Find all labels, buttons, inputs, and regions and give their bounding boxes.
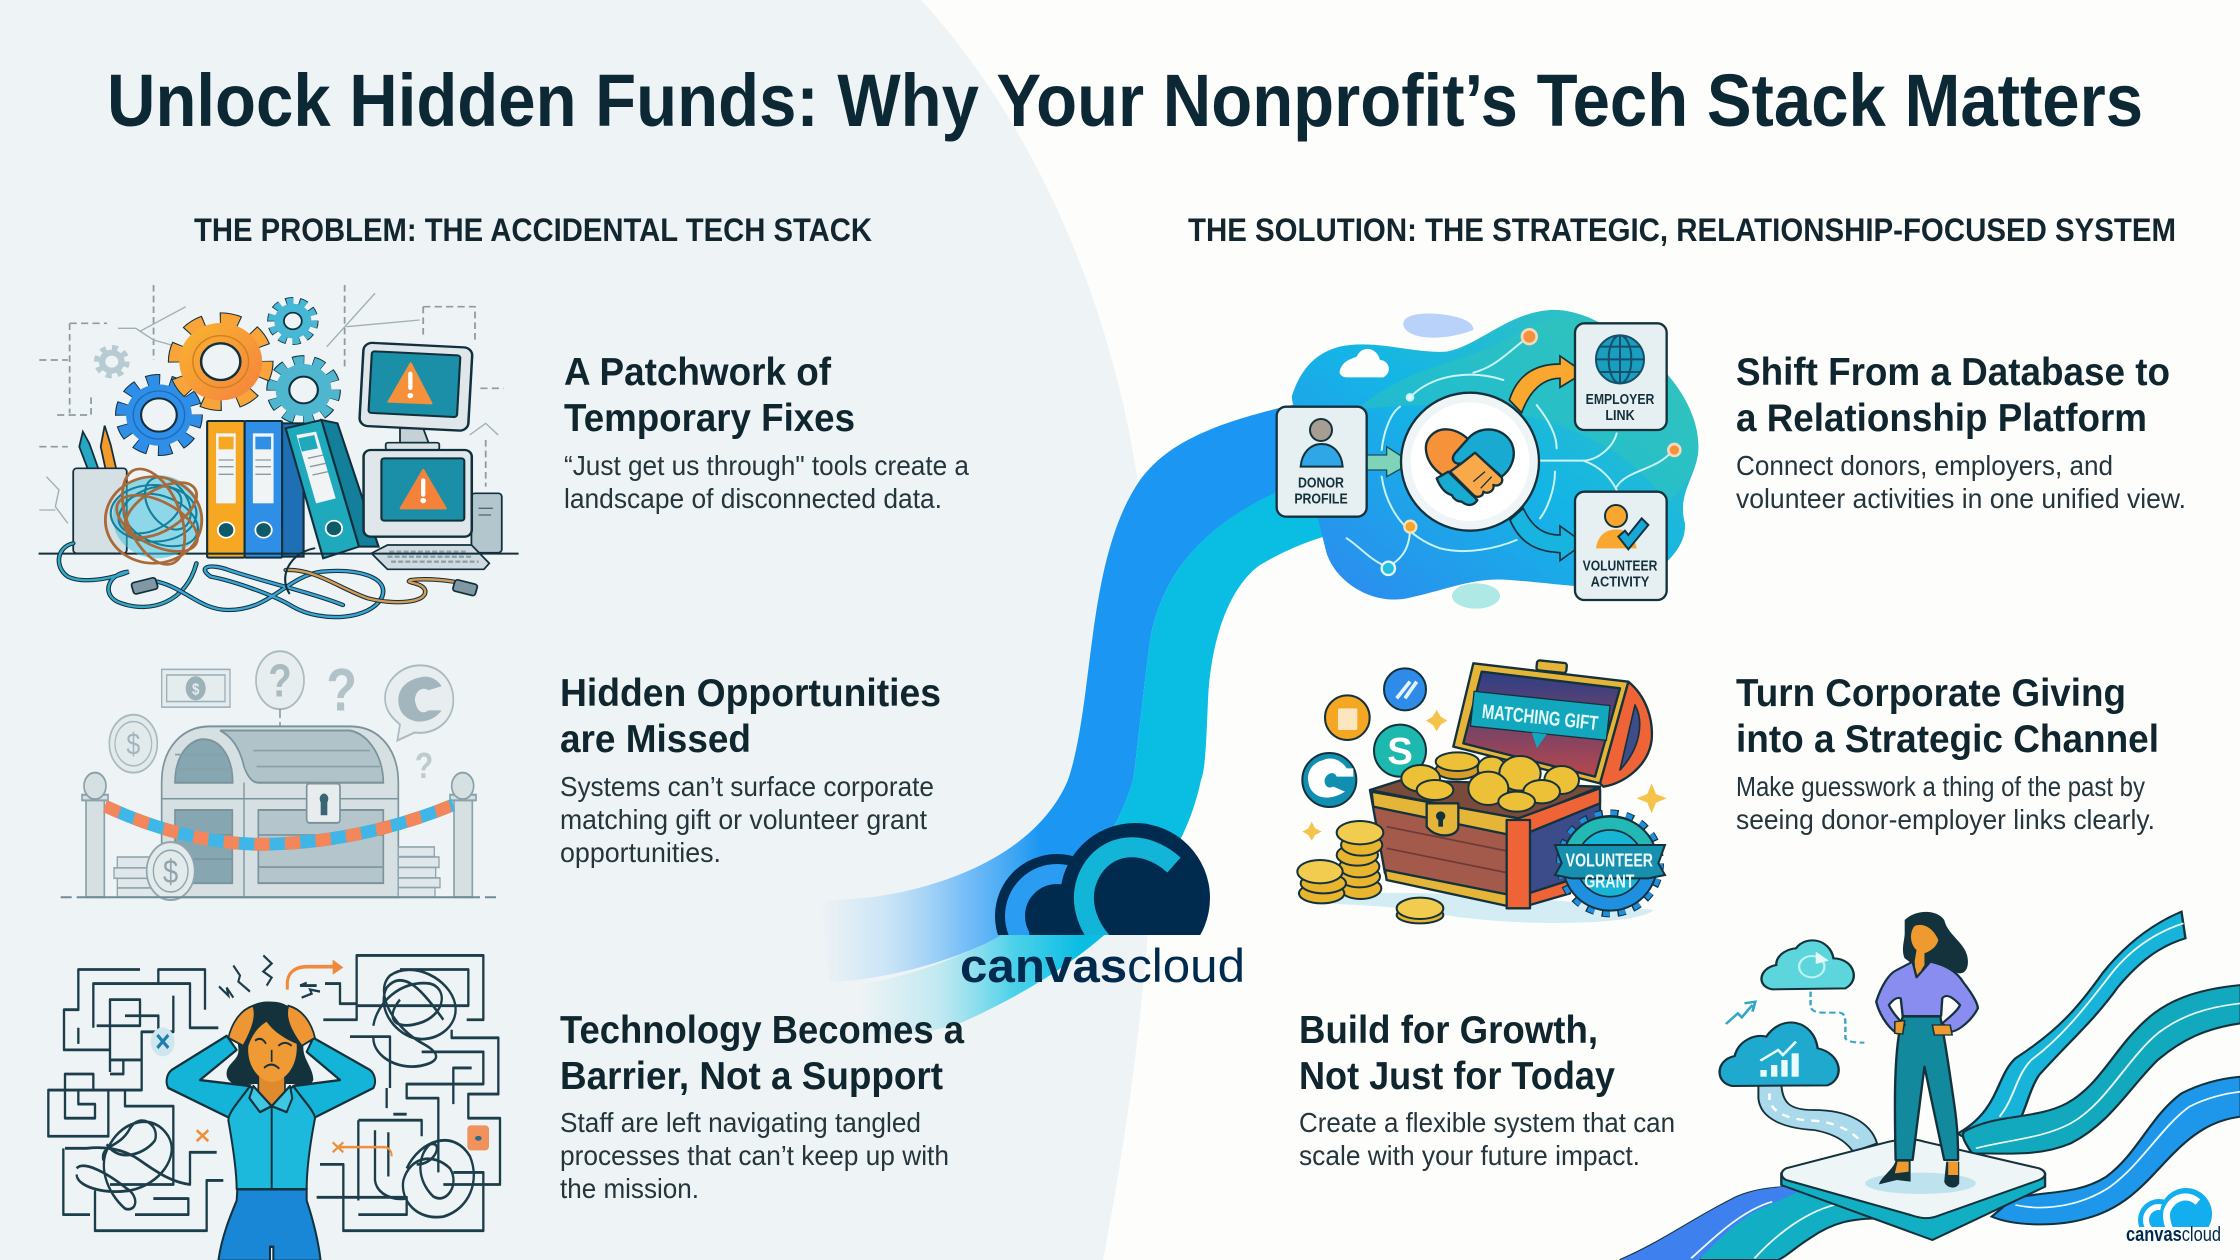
icon: question bubble (256, 651, 304, 740)
text block: patchwork of temporary fixes (564, 351, 969, 514)
card: donor profile: DONOR (1298, 475, 1344, 491)
chest opening (1370, 780, 1600, 820)
icon: blue cloud with chart (1720, 1023, 1839, 1086)
text block: corporate giving: Turn Corporate Giving (1736, 672, 2126, 715)
icon: small question mark: ? (415, 746, 433, 787)
left maze (48, 970, 223, 1231)
text block: build for growth: scale with your future impact. (1299, 1140, 1640, 1171)
text block: patchwork of temporary fixes: A Patchwork of (564, 351, 832, 394)
icons: floating coins (1302, 668, 1426, 807)
text block: relationship platform: Connect donors, employers, and (1736, 450, 2113, 481)
arrow: center to volunteer (1510, 508, 1584, 561)
icon: barrier posts (82, 773, 476, 897)
icon: dollar bill (162, 669, 230, 707)
text block: relationship platform (1736, 351, 2186, 514)
text block: hidden opportunities (560, 672, 941, 868)
icon: gray gear (97, 348, 127, 376)
stream: lower right (1992, 1077, 2240, 1224)
coin stacks (1297, 821, 1443, 923)
icons: floating coins: S (1387, 730, 1413, 773)
person: face and neck (1911, 925, 1938, 977)
person: neck and face (248, 1022, 297, 1106)
icon: document holder (73, 468, 127, 553)
icon: question mark large: ? (326, 656, 357, 723)
icons: sparkles (1302, 710, 1667, 841)
icon: grey chest (162, 726, 398, 897)
badge: volunteer grant: VOLUNTEER (1566, 850, 1653, 871)
icon: tangled cables (105, 461, 207, 572)
icon: orange gear (174, 318, 267, 405)
badge: volunteer grant: GRANT (1584, 871, 1635, 892)
text block: technology becomes a barrier: Staff are left navigating tangled (560, 1107, 921, 1138)
blob accents (1340, 313, 1698, 609)
card: donor profile (1277, 407, 1367, 517)
icon: striped rope (105, 805, 453, 844)
person: hands (1895, 1021, 1952, 1035)
text block: hidden opportunities: Hidden Opportunities (560, 672, 941, 715)
heading: the solution: THE SOLUTION: THE STRATEGIC, RELATIONSHIP-FOCUSED SYSTEM (1188, 212, 2176, 248)
coins in chest (1401, 752, 1579, 812)
icon: teal cloud with pie (1762, 940, 1854, 989)
icon: orange binder (207, 421, 245, 558)
chest lid (1453, 660, 1652, 787)
network lines (1347, 329, 1680, 575)
background: left curved panel (0, 0, 1155, 1260)
text block: hidden opportunities: opportunities. (560, 837, 721, 868)
illustration: patchwork of gears, binders, monitors and cables (39, 285, 519, 617)
icon: computer tower (471, 493, 502, 553)
logo: Canvas Cloud corner (2126, 1188, 2220, 1241)
card: employer link: LINK (1605, 408, 1635, 424)
heading: the problem: THE PROBLEM: THE ACCIDENTAL TECH STACK (194, 212, 872, 248)
blob background (1292, 310, 1698, 600)
text block: patchwork of temporary fixes: Temporary Fixes (564, 397, 855, 440)
text block: relationship platform: Shift From a Database to (1736, 351, 2170, 394)
text block: corporate giving (1736, 672, 2159, 835)
stream: middle right (1963, 985, 2240, 1154)
icon: small teal gear (271, 301, 314, 341)
icons: stress marks (219, 955, 320, 998)
ribbon connecting problem to solution (820, 395, 1340, 1035)
stream: lower left (1620, 1185, 1881, 1260)
text block: technology becomes a barrier (560, 1009, 964, 1204)
text block: corporate giving: into a Strategic Channel (1736, 718, 2159, 761)
chest shadow (1303, 893, 1653, 923)
icon: coin front (147, 842, 195, 900)
text block: hidden opportunities: are Missed (560, 718, 751, 761)
icon: blue gear (121, 380, 196, 450)
icon: coin left: $ (126, 727, 140, 761)
road from cloud (1758, 1083, 1877, 1152)
icon: coin left (109, 715, 157, 773)
icon: coin front: $ (163, 855, 178, 891)
text block: build for growth: Build for Growth, (1299, 1009, 1598, 1052)
icon: lower monitor with warning (364, 450, 472, 537)
card: volunteer activity (1575, 492, 1667, 600)
icon: loose cables below desk (59, 543, 478, 617)
illustration: person on platform with growth streams (1620, 912, 2240, 1260)
logo mark (995, 823, 1210, 935)
text block: patchwork of temporary fixes: landscape of disconnected data. (564, 483, 942, 514)
badge: volunteer grant (1555, 814, 1665, 913)
logo: Canvas Cloud main (960, 823, 1245, 992)
card: employer link (1575, 323, 1667, 430)
logo mark small (2138, 1188, 2212, 1227)
person: trousers (1895, 1017, 1958, 1160)
text block: build for growth (1299, 1009, 1675, 1171)
icon: growth arrow (1726, 1002, 1755, 1024)
person: jeans (218, 1189, 321, 1260)
arrow: center to employer (1509, 356, 1584, 413)
banner: matching gift: MATCHING GIFT (1481, 701, 1599, 735)
icon: speech bubble with C mark (385, 665, 453, 740)
card: volunteer activity: VOLUNTEER (1583, 559, 1658, 575)
illustration: locked grey treasure chest behind barrier (61, 651, 496, 900)
icon: coin stacks (114, 847, 440, 897)
text block: hidden opportunities: Systems can’t surface corporate (560, 771, 934, 802)
right maze (300, 955, 500, 1231)
ground line (61, 895, 496, 900)
text block: technology becomes a barrier: Barrier, Not a Support (560, 1055, 943, 1098)
icon: keyboard (371, 545, 489, 569)
card: donor profile: PROFILE (1294, 491, 1348, 507)
icons: maze markers (151, 959, 489, 1156)
icon: upper monitor with warning (359, 342, 473, 450)
icon: pencils (79, 426, 116, 468)
icon: dashed connector (1811, 992, 1864, 1043)
text block: build for growth: Create a flexible system that can (1299, 1107, 1675, 1138)
desk line (39, 551, 519, 557)
illustration: open treasure chest (1297, 660, 1667, 923)
icon: teal gear (272, 361, 335, 419)
text block: build for growth: Not Just for Today (1299, 1055, 1615, 1098)
illustration: stressed staff member in tangled maze (48, 955, 500, 1260)
person: hands (228, 1006, 315, 1046)
chest body (1370, 788, 1600, 908)
text block: technology becomes a barrier: processes that can’t keep up with (560, 1140, 949, 1171)
banner: matching gift (1469, 691, 1610, 755)
illustration: relationship platform network (1277, 310, 1698, 609)
logo wordmark small: canvascloud (2126, 1224, 2221, 1246)
text block: corporate giving: seeing donor-employer links clearly. (1736, 804, 2155, 835)
text block: hidden opportunities: matching gift or volunteer grant (560, 804, 927, 835)
person: hair (1903, 912, 1968, 973)
logo wordmark: canvascloud (960, 939, 1245, 992)
icon: teal leaning binder (286, 420, 379, 558)
center circle with handshake heart (1401, 393, 1539, 531)
platform (1781, 1139, 2045, 1240)
text block: relationship platform: a Relationship Platform (1736, 397, 2147, 440)
icon: dollar bill: $ (192, 681, 199, 699)
text block: patchwork of temporary fixes: “Just get us through" tools create a (564, 450, 969, 481)
person: torso and arms (167, 1036, 375, 1189)
card: employer link: EMPLOYER (1586, 392, 1655, 408)
text block: technology becomes a barrier: the mission. (560, 1173, 699, 1204)
text block: corporate giving: Make guesswork a thing of the past by (1736, 771, 2145, 802)
person: shoes (1879, 1160, 1959, 1188)
text block: relationship platform: volunteer activities in one unified view. (1736, 483, 2186, 514)
icon: blue binder (245, 421, 304, 558)
text block: technology becomes a barrier: Technology Becomes a (560, 1009, 964, 1052)
icon: question bubble: ? (268, 655, 292, 706)
stream: top right (1958, 912, 2185, 1139)
card: volunteer activity: ACTIVITY (1591, 575, 1650, 591)
person: hair (227, 1001, 313, 1086)
person: blouse and arms (1876, 962, 1978, 1033)
arrow: donor to center (1365, 447, 1412, 477)
